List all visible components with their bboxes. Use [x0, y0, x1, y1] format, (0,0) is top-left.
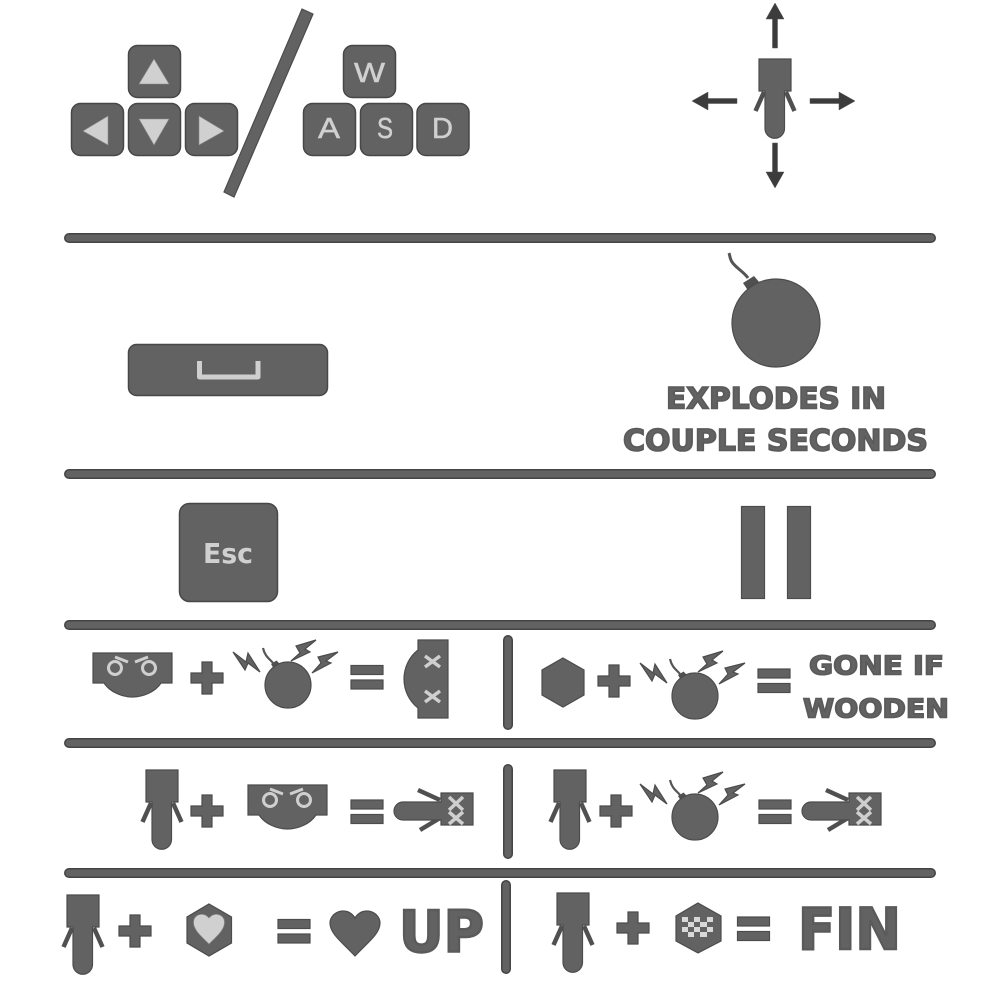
divider 2: [69, 469, 931, 479]
key: S: S: [377, 113, 393, 145]
divider 3: [69, 620, 931, 630]
icon: heart: [330, 911, 380, 956]
key: W: W: [354, 57, 386, 88]
text: FIN: FIN: [798, 897, 901, 963]
key: A: A: [318, 113, 341, 145]
icon: heart hexagon: [187, 904, 232, 956]
panel: arrow keys: [72, 46, 238, 156]
equation: player plus enemy equals dead player: [142, 770, 473, 849]
key: left arrow: [72, 104, 124, 156]
key: right arrow: [186, 104, 238, 156]
text: explodes in couple seconds: EXPLODES IN: [666, 382, 886, 416]
key: Esc: Esc: [203, 537, 253, 570]
key: down arrow: [128, 104, 180, 156]
key: A: [304, 104, 356, 156]
key: D: [417, 104, 469, 156]
divider 4: [69, 738, 931, 748]
key: S: [360, 104, 412, 156]
vertical divider row 6: [501, 885, 511, 969]
arrow: down: [766, 143, 784, 188]
icon: large bomb: [729, 253, 820, 367]
panel: WASD keys: [304, 46, 469, 156]
icon: hexagon block: [542, 658, 584, 707]
equation: block plus bomb gone if wooden: [542, 651, 949, 724]
text: explodes in couple seconds: [623, 382, 928, 458]
divider 5: [69, 868, 931, 878]
equation: player plus heart block equals heart up: [64, 895, 484, 974]
key: Esc: [180, 504, 278, 602]
icon: checkered hexagon: [676, 903, 721, 953]
text: gone if wooden: [803, 652, 949, 724]
vertical divider row 5: [503, 769, 513, 854]
key: D: D: [432, 113, 453, 145]
key: space bar: [128, 344, 328, 396]
slash separator: [224, 9, 313, 197]
arrow: left: [692, 92, 737, 110]
divider 1: [69, 233, 931, 243]
icon: player with four direction arrows: [692, 3, 855, 188]
vertical divider row 4: [503, 640, 513, 725]
equation: player plus bomb equals dead player: [550, 770, 881, 849]
text: gone if wooden: GONE IF: [809, 652, 944, 682]
text: UP: UP: [399, 900, 484, 966]
icon: pause: [742, 506, 810, 598]
icon: dead enemy: [404, 640, 448, 718]
equation: enemy plus bomb equals dead enemy: [93, 640, 448, 718]
text: explodes in couple seconds: COUPLE SECONDS: [623, 424, 928, 458]
equation: player plus checkered block equals fin: [554, 893, 901, 972]
text: gone if wooden: WOODEN: [803, 694, 949, 724]
arrow: up: [766, 3, 784, 48]
arrow: right: [810, 92, 855, 110]
key: W: [344, 46, 396, 98]
key: up arrow: [128, 46, 180, 98]
